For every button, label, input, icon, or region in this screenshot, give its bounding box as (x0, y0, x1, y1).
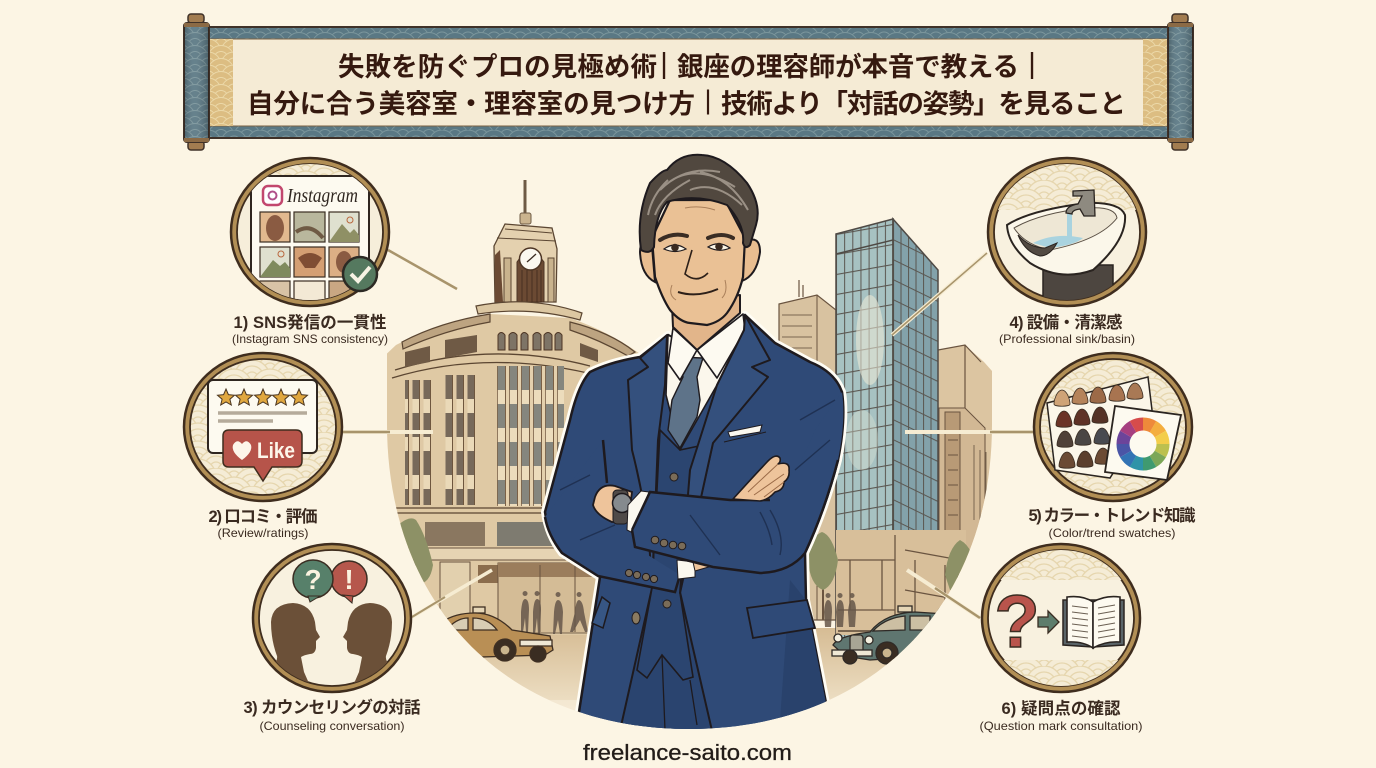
item 3: counseling (244, 544, 421, 733)
fold lines (560, 400, 835, 555)
tall windows right (580, 380, 602, 505)
left roller (184, 14, 209, 150)
hair (640, 155, 758, 252)
waistcoat (637, 430, 713, 680)
taxi left (435, 607, 553, 662)
building body (380, 314, 640, 635)
connector 4 (892, 253, 987, 335)
face (652, 200, 745, 325)
classic car right (832, 606, 945, 664)
lower forearm (545, 440, 680, 592)
ground fade toward bottom (550, 700, 576, 710)
icon: swatch chart and colour wheel (1034, 353, 1192, 501)
connector 2 (343, 430, 433, 434)
man in navy three-piece suit (545, 155, 843, 745)
dome ring (476, 302, 582, 320)
hand under arm (693, 562, 712, 571)
clock (520, 248, 542, 270)
icon: question mark, arrow and book: ? (994, 580, 1040, 663)
item 6: question check (980, 544, 1142, 733)
waist pocket left (592, 597, 610, 628)
title line 2: | (704, 85, 712, 115)
shirt cuff (627, 491, 649, 533)
left lapel (628, 335, 667, 588)
side upper windows (405, 335, 598, 367)
waist pocket right (747, 600, 815, 638)
glass tower front face (836, 219, 893, 640)
title line 1: 失敗を防ぐプロの見極め術 (338, 52, 657, 82)
icon: shampoo basin (988, 158, 1146, 306)
website url: freelance-saito.com (583, 740, 792, 765)
icon: two heads with speech bubbles: ? (304, 564, 322, 595)
sidewalk edge line (458, 632, 588, 634)
shirt (665, 336, 728, 451)
title line 2: 技術より「対話の姿勢」を見ること (721, 89, 1126, 119)
eyes (664, 243, 730, 252)
icon: review card: Like (257, 438, 295, 463)
ground (456, 628, 918, 710)
title line 1: 銀座の理容師が本音で教える (677, 52, 1019, 82)
pedestrians right (824, 593, 856, 627)
icon: two heads with speech bubbles (253, 544, 411, 692)
neck (672, 295, 740, 350)
right roller (1168, 14, 1193, 150)
collar wings (668, 314, 745, 380)
icon: instagram badge: Instagram (286, 185, 358, 207)
left gold panel (209, 39, 233, 126)
central scene: Ginza street (380, 155, 1000, 745)
trousers (619, 588, 713, 735)
white under cuff (677, 560, 695, 579)
fingers over arm (733, 456, 789, 501)
colour wheel (1116, 417, 1170, 471)
floor lines (392, 354, 600, 378)
tower body (494, 180, 557, 302)
face creases (671, 207, 726, 300)
right ear (742, 240, 760, 281)
item 5: color swatches (1028, 353, 1196, 540)
item 2: reviews (184, 353, 342, 540)
icon: instagram badge (230, 158, 390, 316)
banner parchment panel (209, 39, 1167, 126)
label 4 japanese: 4) 設備・清潔感 (1010, 312, 1123, 332)
label 2 english: (Review/ratings) (218, 526, 308, 540)
sleeve buttons upper (651, 536, 686, 550)
right lapel (680, 315, 770, 593)
glass reflections (836, 240, 893, 470)
icon: review card (184, 353, 342, 501)
glass tower side face (893, 219, 938, 640)
tree far right (945, 540, 970, 590)
nose (685, 250, 708, 279)
wako building (380, 180, 640, 635)
eyebrows (660, 235, 733, 240)
scroll banner title (184, 14, 1193, 150)
tall windows left (446, 375, 475, 505)
label 5 english: (Color/trend swatches) (1048, 526, 1176, 540)
pedestrians left (521, 591, 588, 634)
label 3 english: (Counseling conversation) (260, 719, 405, 733)
title line 2: 自分に合う美容室・理容室の見つけ方 (247, 89, 695, 119)
label 6 japanese: 6) 疑問点の確認 (1002, 699, 1121, 718)
connector 5 (905, 430, 1033, 434)
sleeve buttons lower (625, 569, 658, 583)
label 1 english: (Instagram SNS consistency) (232, 332, 388, 346)
hand and wrist (593, 485, 632, 522)
title line 1: | (1028, 48, 1036, 80)
label 4 english: (Professional sink/basin) (999, 332, 1135, 346)
label 6 english: (Question mark consultation) (980, 719, 1142, 733)
upper forearm outline (632, 460, 838, 573)
lower forearm edge (545, 440, 680, 592)
connector 1 (388, 250, 457, 289)
item 4: sink (988, 158, 1146, 346)
label 3 japanese: 3) カウンセリングの対話 (244, 697, 421, 717)
jacket shading (780, 580, 826, 720)
arched upper windows (498, 332, 562, 350)
mouth (678, 289, 718, 294)
title line 1: | (660, 48, 668, 80)
label 2 japanese: 2) 口コミ・評価 (208, 507, 318, 526)
left ear (640, 243, 655, 282)
title line 2 (247, 85, 1126, 119)
jacket outline (545, 315, 843, 745)
street level building right (836, 530, 960, 635)
tie (668, 357, 703, 448)
tree right (808, 532, 838, 620)
jacket button (632, 612, 640, 624)
banner blue border (205, 27, 1171, 138)
icon: question mark, arrow and book (982, 544, 1140, 692)
icon: two heads with speech bubbles: ! (344, 564, 354, 595)
pocket square (728, 425, 762, 437)
jacket silhouette with white halo (545, 315, 843, 745)
item 1: SNS consistency (230, 158, 390, 346)
right beige building (938, 344, 992, 610)
tall windows centre (497, 366, 564, 506)
watch (612, 490, 632, 524)
breast pocket line (724, 432, 766, 442)
title line 1 (338, 48, 1036, 82)
low building behind, right (779, 280, 836, 620)
vest buttons (663, 473, 678, 608)
label 5 japanese: 5) カラー・トレンド知識 (1028, 506, 1196, 525)
roof cornices (402, 314, 490, 349)
lower floor (396, 507, 596, 632)
label 1 japanese: 1) SNS発信の一貫性 (234, 313, 386, 332)
hair highlights (648, 170, 748, 215)
connector 6 (907, 570, 980, 618)
upper forearm (632, 392, 843, 573)
tree left (400, 518, 433, 582)
right gold panel (1143, 39, 1167, 126)
connector 3 (412, 570, 492, 617)
